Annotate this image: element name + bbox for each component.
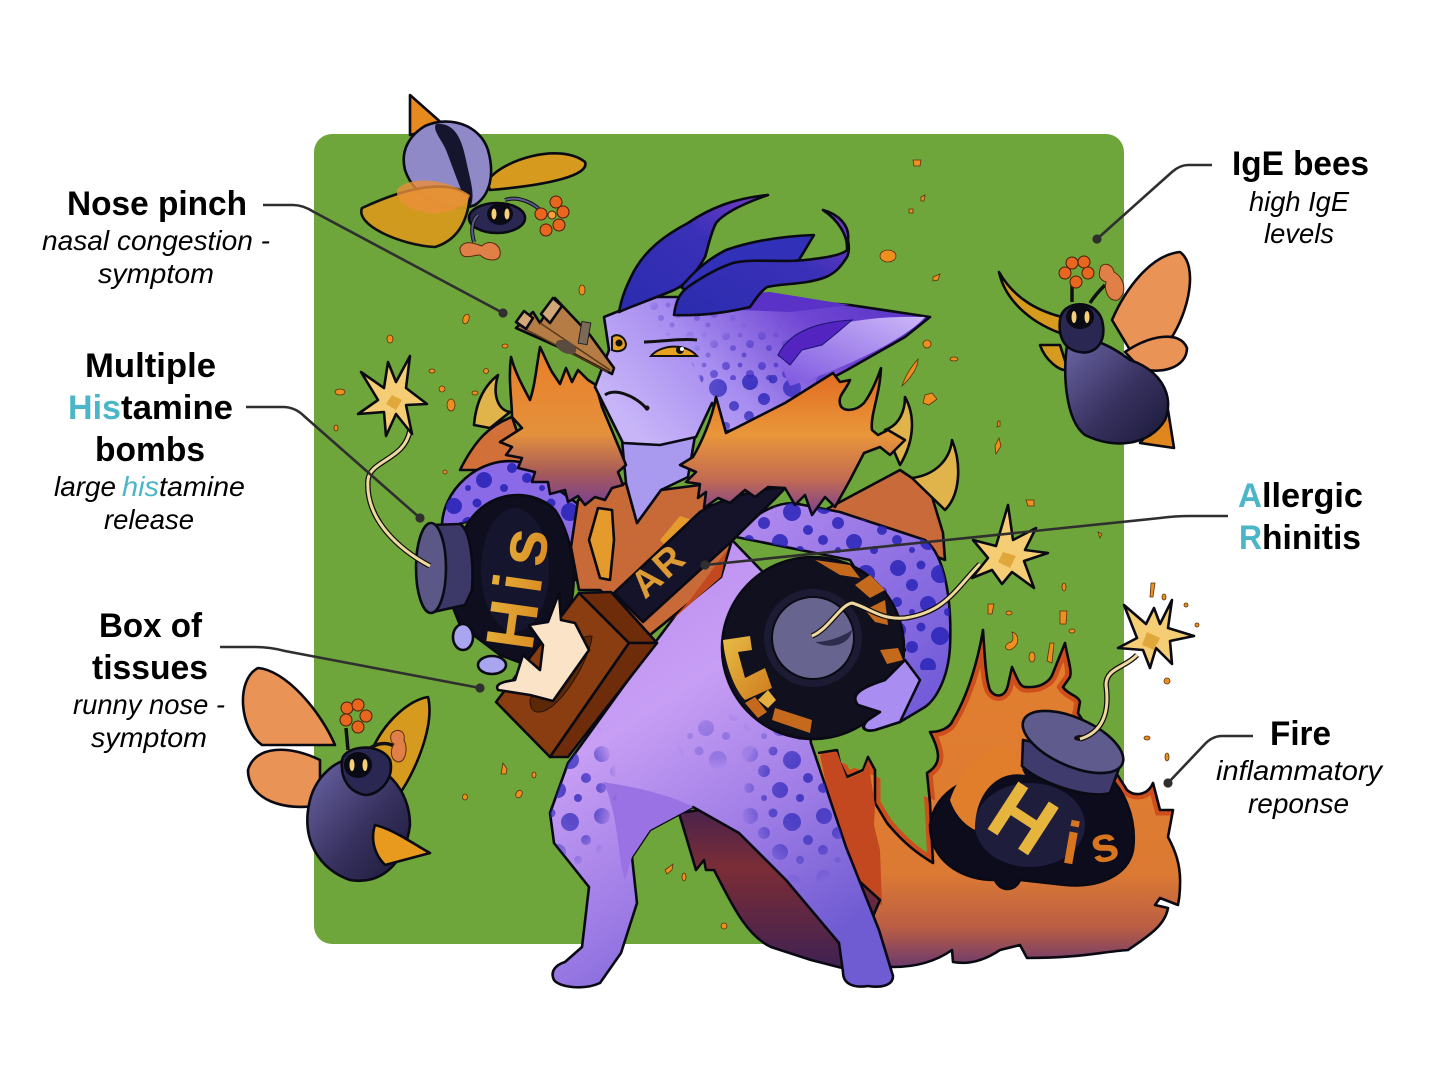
label: multiple histamine bombs: tamine xyxy=(121,389,233,427)
label: multiple histamine bombs: Multiple xyxy=(85,347,216,385)
leader: allergic rhinitis xyxy=(700,516,1228,570)
left bomb with His label: His xyxy=(472,515,565,654)
label: multiple histamine bombs: bombs xyxy=(95,431,205,469)
collar: right fur xyxy=(680,368,905,515)
leader: IgE bees xyxy=(1092,165,1212,244)
label: allergic rhinitis xyxy=(1238,477,1363,557)
label: nose pinch xyxy=(42,185,270,289)
fuse and spark: left bomb xyxy=(358,356,430,566)
tissue xyxy=(497,593,589,701)
label: IgE bees: levels xyxy=(1264,218,1334,249)
brow and mouth xyxy=(605,339,697,410)
cape: rear orange cape xyxy=(460,417,945,560)
label: multiple histamine bombs: His xyxy=(68,389,121,427)
label: allergic rhinitis: hinitis xyxy=(1262,519,1361,557)
tail bomb with His label: H xyxy=(973,765,1072,873)
label: multiple histamine bombs: large xyxy=(54,471,116,502)
strap with AR label xyxy=(614,487,786,622)
back leg xyxy=(679,800,880,970)
label: box of tissues: symptom xyxy=(91,722,207,753)
horn spikes on cape xyxy=(474,375,958,510)
tail bomb with His label: s xyxy=(1085,814,1123,875)
box of tissues xyxy=(496,592,657,757)
tail: flaming fur tail xyxy=(818,630,1180,967)
label: multiple histamine bombs: release xyxy=(104,504,194,535)
leader: nose pinch xyxy=(263,205,508,318)
chest fur under neck xyxy=(622,430,696,523)
label: nose pinch: nasal congestion - xyxy=(42,225,270,256)
eyes xyxy=(612,335,626,351)
label: box of tissues: tissues xyxy=(92,649,208,687)
leader: fire xyxy=(1163,736,1253,788)
label: allergic rhinitis: A xyxy=(1238,477,1262,515)
tail bomb with His label: i xyxy=(1058,809,1086,878)
background green panel xyxy=(314,134,1124,944)
embers: scattered orange particles xyxy=(334,160,1199,929)
label: fire: inflammatory xyxy=(1216,755,1384,786)
leader: box of tissues xyxy=(220,647,485,693)
label: box of tissues: runny nose - xyxy=(73,689,225,720)
label: box of tissues: Box of xyxy=(99,607,203,645)
label: IgE bees: IgE bees xyxy=(1232,145,1369,183)
collar: left fur xyxy=(500,347,626,505)
body: torso and front legs xyxy=(530,540,893,987)
strap with AR label: AR xyxy=(623,536,695,607)
label: allergic rhinitis: llergic xyxy=(1262,477,1363,515)
label: multiple histamine bombs: his xyxy=(122,471,159,502)
label: nose pinch: symptom xyxy=(98,258,214,289)
bee: top xyxy=(361,95,585,260)
clothespin on nose xyxy=(516,298,614,374)
right hand on bomb xyxy=(855,660,920,731)
horns xyxy=(619,195,849,315)
left bomb with His label xyxy=(416,495,574,674)
fuse and spark: right bomb xyxy=(812,505,1048,636)
vest: orange vest and gem xyxy=(571,483,732,635)
label: fire: Fire xyxy=(1270,715,1331,753)
label: nose pinch: Nose pinch xyxy=(67,185,247,223)
label: fire: reponse xyxy=(1248,788,1349,819)
arm left: spotted arm xyxy=(440,460,576,582)
label: IgE bees xyxy=(1232,145,1369,249)
label: box of tissues xyxy=(73,607,225,753)
label: multiple histamine bombs: tamine xyxy=(159,471,245,502)
arm right: spotted arm and hand xyxy=(730,500,960,731)
bee: right xyxy=(999,252,1190,448)
leader: histamine bombs xyxy=(246,407,425,523)
bee: bottom left xyxy=(243,668,430,881)
label: allergic rhinitis: R xyxy=(1239,519,1262,557)
right bomb xyxy=(722,557,904,739)
label: IgE bees: high IgE xyxy=(1249,186,1349,217)
head: face, ear and spots xyxy=(595,290,930,445)
tail bomb with His label xyxy=(930,698,1134,889)
label: multiple histamine bombs xyxy=(54,347,245,535)
label: fire xyxy=(1216,715,1384,819)
fuse and spark: tail bomb xyxy=(1080,600,1194,739)
